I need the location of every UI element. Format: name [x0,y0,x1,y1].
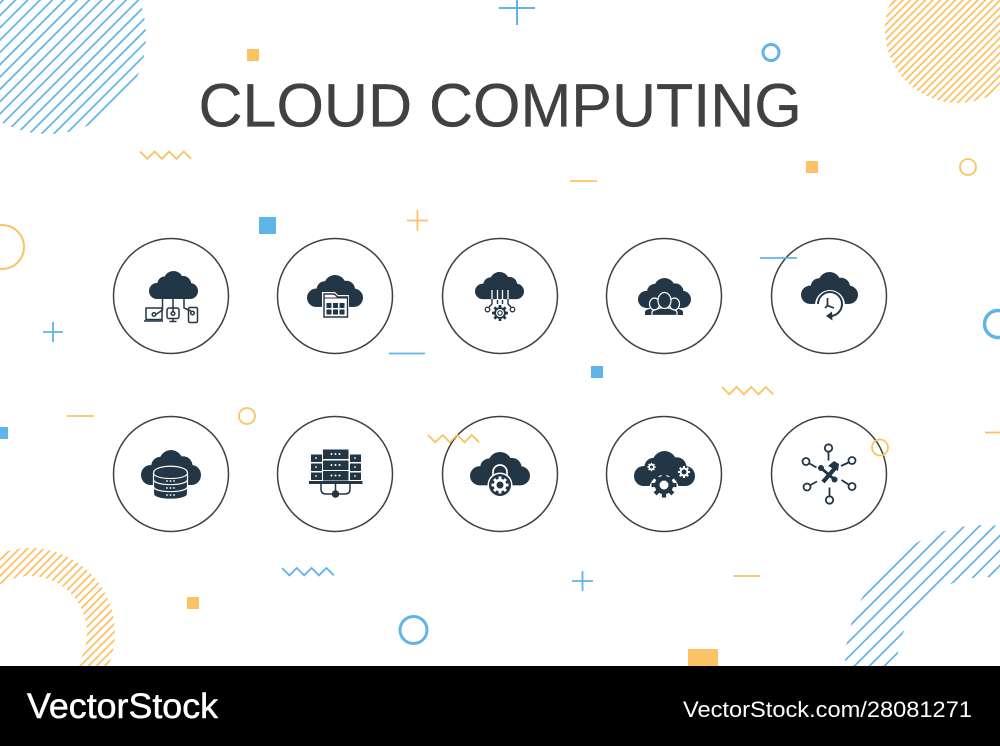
icon circle: devices connected to cloud [114,238,228,354]
decoration: orange hatched ring bottom left [0,577,89,692]
icon circle: tools network [772,416,886,532]
footer logo: VectorStock [27,687,219,726]
title: CLOUD COMPUTING [198,72,802,140]
decorative shapes overlapping the icon circles [428,258,888,456]
icon circle: cloud users [606,238,722,354]
icon circle: cloud file manager [278,238,392,354]
icon circle: server network [278,416,392,532]
icon circle: cloud database [114,416,228,532]
decoration: blue hatched ring bottom right [890,570,1000,680]
decoration: orange hatched circle top right [893,0,998,98]
footer url: VectorStock.com/28081271 [683,697,972,722]
footer bar [0,666,1000,746]
icon circle: cloud security lock [442,416,558,532]
icon circle: cloud backup clock [772,238,886,354]
icon circle: cloud circuit with gear [442,238,558,354]
decoration: blue hatched circle top left [0,0,120,108]
icon circle: cloud settings gears [606,416,722,532]
